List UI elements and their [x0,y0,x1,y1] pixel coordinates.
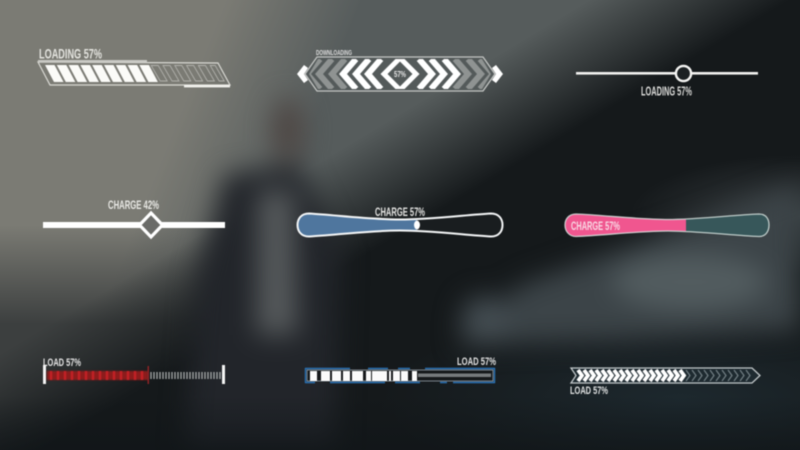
widget: red tick load bar [43,357,225,384]
label: charge 42%: CHARGE 42% [108,200,159,212]
label: charge 57%: CHARGE 57% [571,221,620,233]
frame [38,62,230,85]
widget: blue framed block load bar [305,356,496,383]
label: load 57%: LOAD 57% [457,356,496,368]
empty segments [151,66,224,81]
dark chevrons [686,370,750,381]
frame [571,368,760,383]
widget: pink hourglass charge bar [565,214,769,236]
label: load 57%: LOAD 57% [43,357,81,369]
label: downloading: DOWNLOADING [316,50,352,57]
red progress [47,371,148,380]
remaining track [418,374,491,377]
label: charge 57%: CHARGE 57% [375,207,425,219]
widget: blue hourglass charge bar [298,207,502,236]
arrow tips [297,65,503,83]
widget: loading bar with slanted segments [38,46,230,87]
label: loading 57%: LOADING 57% [641,84,692,98]
widget: thin slider with ring [576,66,758,98]
white chevrons [578,370,684,381]
widget: charge slider with diamond [43,200,225,237]
chevrons [307,58,493,90]
label: load 57%: LOAD 57% [570,385,608,397]
widget: chevron arrow load bar [570,368,760,397]
label: loading 57%: LOADING 57% [39,46,102,62]
hexagon frame [305,57,495,91]
frame [306,369,494,382]
filled segments [45,65,158,82]
remaining ticks [151,372,220,379]
blocks [310,371,417,381]
percent label: 57% [394,70,406,79]
widget: downloading hexagon chevrons [297,50,503,91]
